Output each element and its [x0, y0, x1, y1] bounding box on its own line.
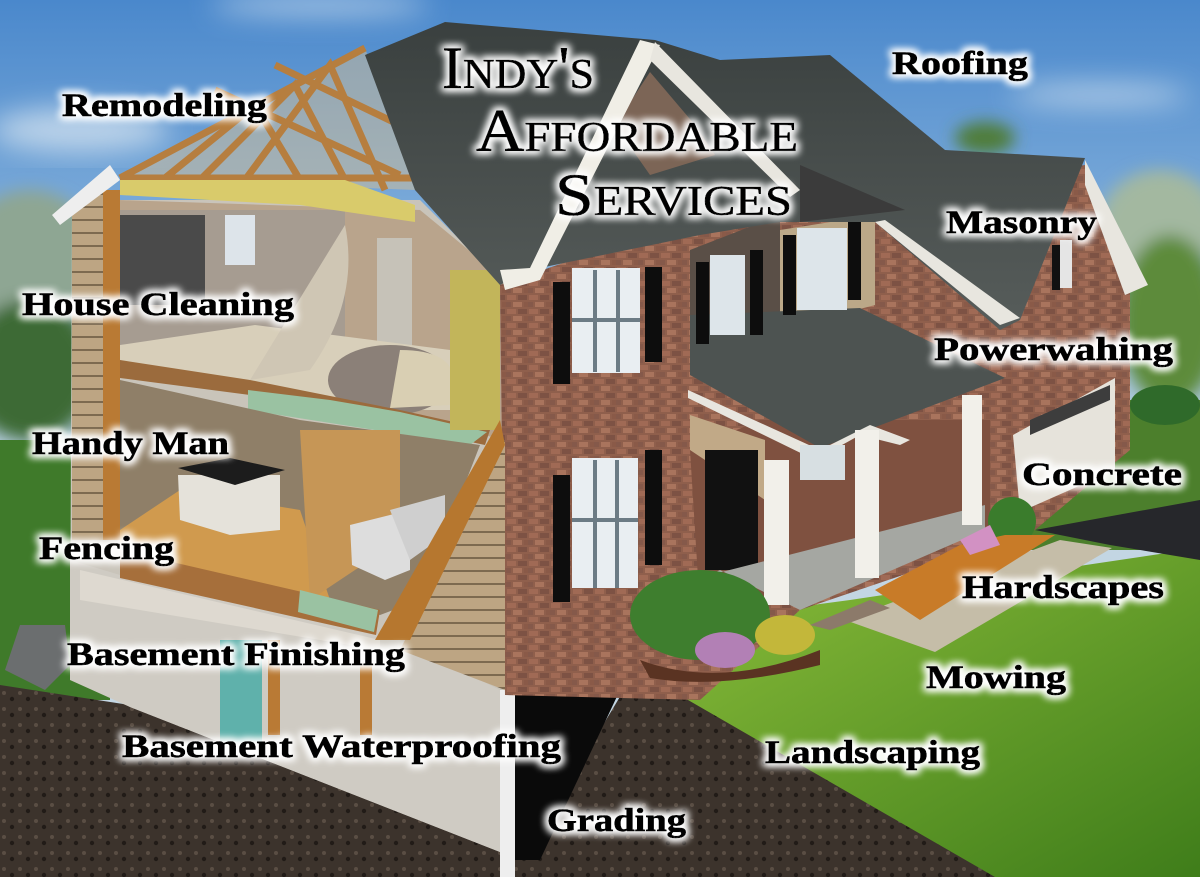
- service labels: Powerwahing: [934, 332, 1174, 368]
- service labels: Concrete: [1022, 457, 1182, 493]
- service labels: Basement Finishing: [67, 637, 406, 673]
- title: Indy's: [442, 35, 594, 101]
- service labels: Roofing: [892, 46, 1029, 82]
- service labels: Landscaping: [765, 735, 981, 771]
- service labels: Masonry: [946, 205, 1098, 241]
- service labels: Mowing: [926, 660, 1067, 696]
- service labels: Hardscapes: [962, 570, 1164, 606]
- landscaping shrubs: [630, 497, 1112, 682]
- service labels: Grading: [547, 803, 687, 839]
- roofs: [365, 22, 1148, 460]
- garage door: [1013, 378, 1115, 512]
- title: Services: [555, 162, 792, 228]
- distant trees: [0, 122, 1200, 440]
- cutaway backing: [70, 200, 505, 852]
- service labels: Handy Man: [32, 426, 229, 462]
- service labels: Fencing: [39, 531, 175, 567]
- title: [442, 35, 798, 228]
- main house brick walls: [375, 165, 1130, 700]
- windows and shutters: [553, 222, 1072, 602]
- cutaway basement: [5, 560, 636, 877]
- porch columns: [764, 395, 982, 605]
- cutaway interior: [52, 165, 505, 635]
- clouds: [0, 0, 1190, 152]
- service labels: Basement Waterproofing: [122, 729, 562, 765]
- service labels: Remodeling: [62, 88, 268, 124]
- exposed roof trusses: [120, 48, 415, 222]
- lawn and ground: [0, 385, 1200, 877]
- service labels: House Cleaning: [22, 287, 295, 323]
- title: Affordable: [476, 98, 798, 164]
